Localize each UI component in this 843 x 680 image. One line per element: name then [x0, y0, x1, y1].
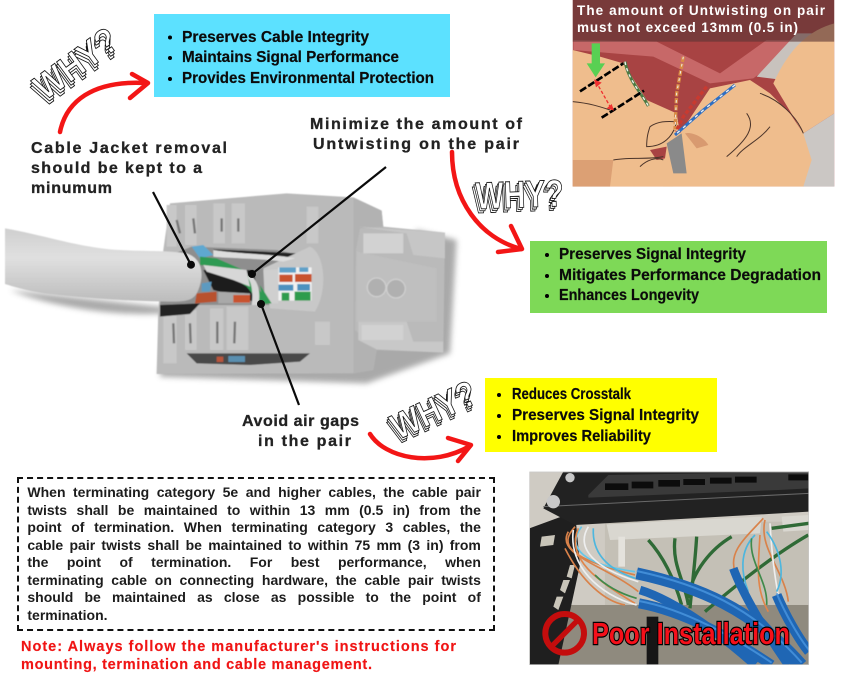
label: cable jacket removal: Cable Jacket removal	[31, 140, 227, 157]
heading: WHY lower: WHY?	[384, 372, 483, 447]
label: cable jacket removal: should be kept to a	[31, 160, 202, 177]
heading: WHY lower: WHY?	[383, 377, 482, 452]
arrow: to blue panel	[60, 74, 148, 132]
label: avoid air gaps: in the pair	[258, 433, 351, 450]
note: manufacturer instructions	[21, 639, 456, 673]
connector line: jacket removal	[153, 192, 195, 269]
photo: hands untwisting pair with caption	[573, 0, 834, 187]
heading: WHY top-left: WHY?	[26, 19, 126, 107]
photo: poor installation patch panel: Poor Installation	[592, 616, 790, 651]
photo: hands untwisting pair with caption: must not exceed 13mm (0.5 in)	[577, 20, 798, 35]
connector line: air gaps	[257, 300, 299, 405]
label: cable jacket removal: minumum	[31, 180, 112, 197]
panel: untwisting benefits: Mitigates Performance Degradation	[559, 267, 821, 284]
photo: hands untwisting pair with caption: The amount of Untwisting on pair	[577, 3, 826, 18]
panel: jacket removal benefits	[154, 14, 450, 97]
text block: termination standards	[17, 477, 495, 631]
text block: termination standards: point of termination. When terminating category 3 cables, the	[27, 519, 481, 535]
heading: WHY centre-right: WHY?	[472, 177, 561, 222]
text block: termination standards: should be maintained as close as possible to the point of	[27, 589, 481, 605]
photo: poor installation patch panel	[529, 472, 809, 665]
panel: jacket removal benefits: Maintains Signal Performance	[182, 49, 399, 66]
label: cable jacket removal	[31, 140, 227, 197]
panel: jacket removal benefits: Preserves Cable Integrity	[182, 29, 369, 46]
panel: jacket removal benefits: Provides Environmental Protection	[182, 70, 434, 87]
heading: WHY top-left: WHY?	[25, 25, 125, 114]
label: avoid air gaps: Avoid air gaps	[242, 413, 359, 430]
text block: termination standards: cable pair twists shall be maintained to within 75 mm (3 in) from	[27, 536, 481, 552]
label: minimize untwisting: Minimize the amount of	[310, 116, 523, 133]
panel: air gap benefits	[485, 378, 717, 452]
note: manufacturer instructions: Note: Always follow the manufacturer's instructions for	[21, 639, 456, 655]
panel: air gap benefits: Reduces Crosstalk	[512, 386, 631, 403]
photo: keystone jack with terminated cable	[5, 193, 457, 383]
panel: untwisting benefits	[530, 241, 827, 313]
heading: WHY centre-right: WHY?	[473, 175, 563, 220]
arrow: to green panel	[452, 152, 522, 252]
panel: untwisting benefits: Preserves Signal Integrity	[559, 246, 746, 263]
text block: termination standards: terminating cable on connecting hardware, the cable pair twists	[27, 572, 481, 588]
panel: air gap benefits: Preserves Signal Integrity	[512, 407, 699, 424]
heading: WHY top-left: WHY?	[25, 22, 126, 111]
note: manufacturer instructions: mounting, termination and cable management.	[21, 657, 372, 673]
arrow: to yellow panel	[370, 434, 471, 461]
label: minimize untwisting: Untwisting on the pair	[313, 136, 519, 153]
label: avoid air gaps	[242, 413, 359, 450]
label: minimize untwisting	[310, 116, 523, 153]
text block: termination standards: termination.	[27, 606, 108, 622]
panel: air gap benefits: Improves Reliability	[512, 428, 651, 445]
heading: WHY centre-right: WHY?	[475, 173, 564, 218]
text block: termination standards: twists shall be maintained to within 13 mm (0.5 in) from the	[27, 502, 481, 518]
connector line: untwisting	[248, 167, 386, 278]
text block: termination standards: the point of termination. For best performance, when	[27, 554, 481, 570]
text block: termination standards: When terminating category 5e and higher cables, the cable pair	[27, 484, 481, 500]
panel: untwisting benefits: Enhances Longevity	[559, 287, 699, 304]
heading: WHY lower: WHY?	[384, 375, 482, 450]
